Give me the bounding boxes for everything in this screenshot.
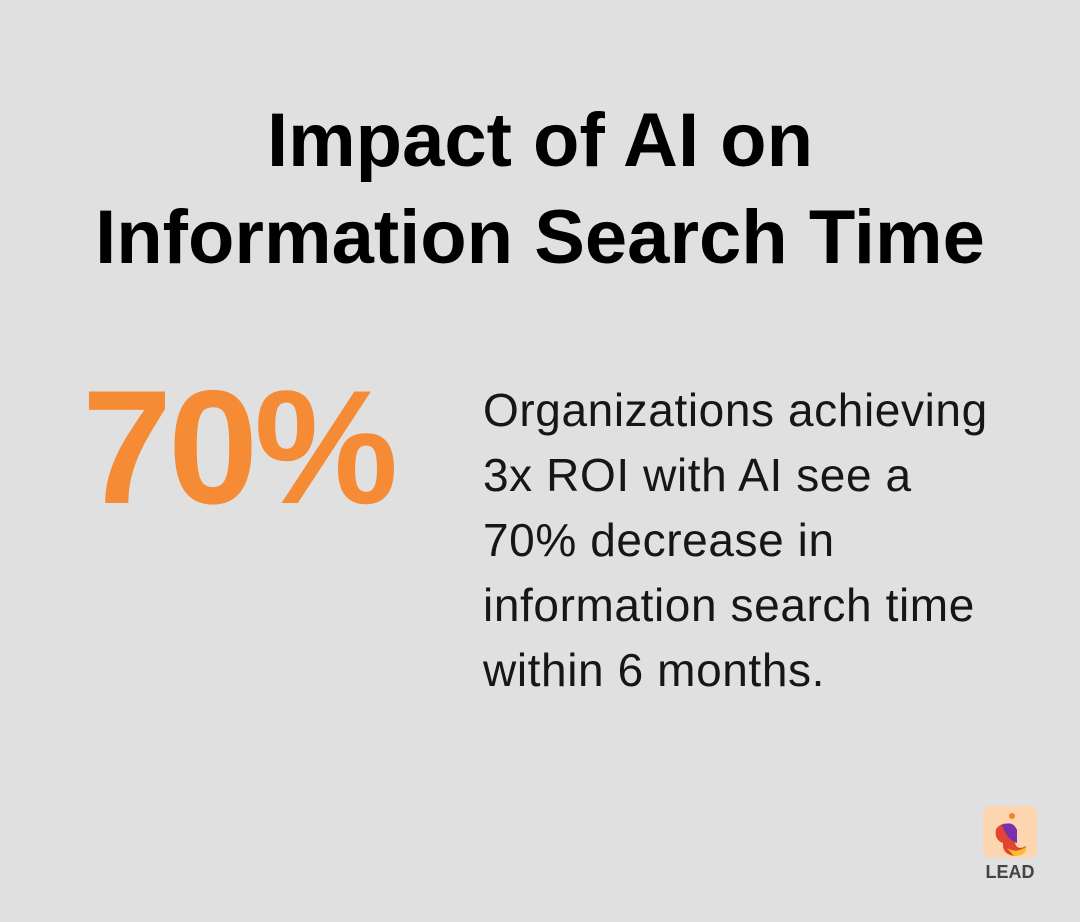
title: Impact of AI on: [267, 98, 813, 183]
logo: [983, 806, 1037, 881]
description text: information search time: [483, 579, 975, 631]
description text: Organizations achieving: [483, 384, 988, 436]
description text: [483, 384, 988, 696]
description text: 70% decrease in: [483, 514, 835, 566]
description text: within 6 months.: [483, 644, 825, 696]
title: Information Search Time: [95, 195, 985, 280]
description text: 3x ROI with AI see a: [483, 449, 912, 501]
big stat: 70%: [82, 357, 394, 538]
title: [95, 98, 985, 280]
